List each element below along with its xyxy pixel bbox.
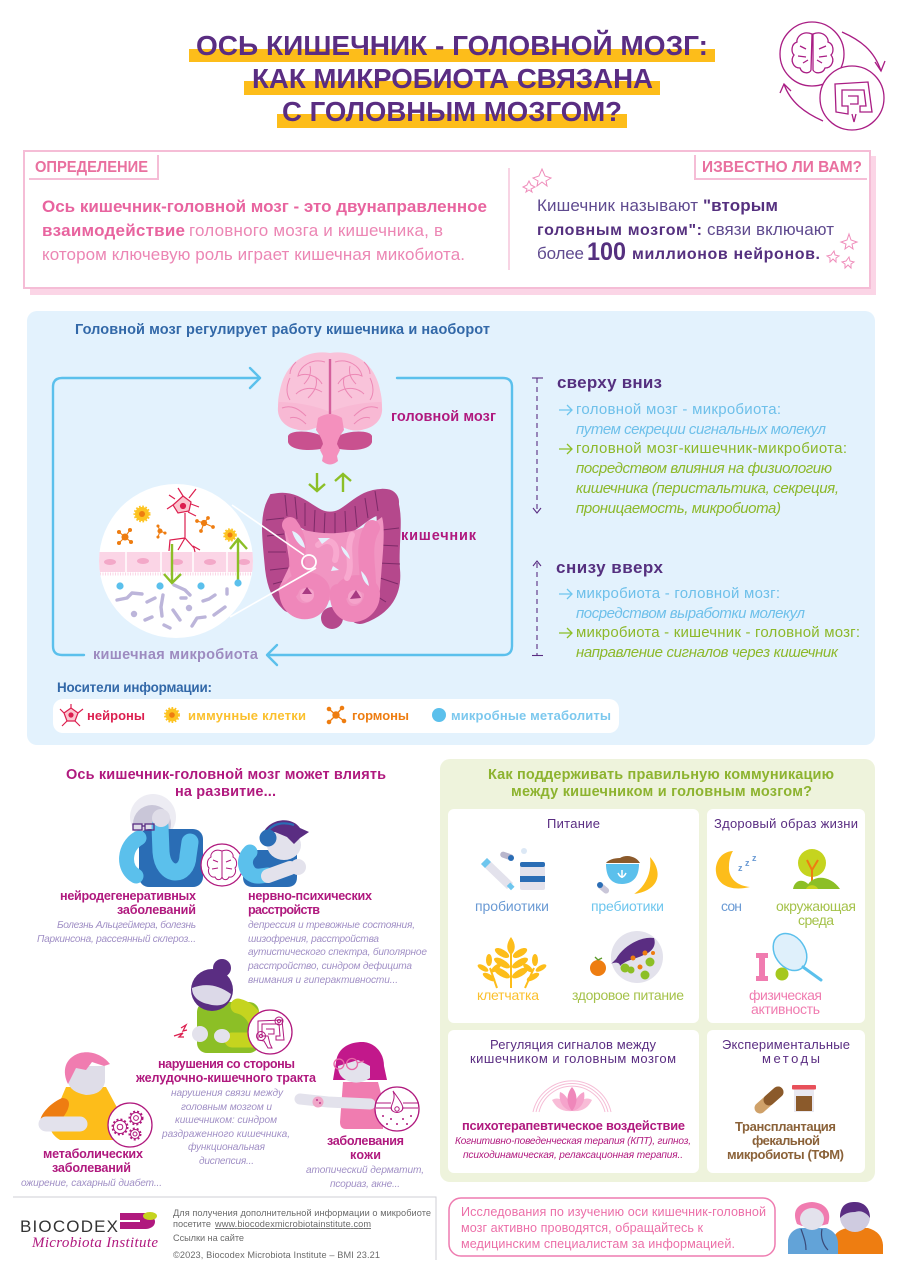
text: did you know: более bbox=[537, 244, 584, 263]
text: neurodegenerative bbox=[37, 889, 196, 945]
text: metabolic: ожирение, сахарный диабет... bbox=[21, 1177, 162, 1189]
callout: медицинским специалистам за информацией. bbox=[461, 1237, 735, 1251]
text: neuropsychiatric: аутистического спектра, биполярное bbox=[248, 946, 427, 958]
text: did you know: связи включают bbox=[707, 220, 834, 239]
panel: signal regulation bbox=[448, 1030, 699, 1173]
text: neuropsychiatric bbox=[247, 889, 427, 986]
heading: experimental: методы bbox=[762, 1051, 820, 1066]
label: fmt: Трансплантация bbox=[735, 1119, 836, 1134]
icon: magnified microbiota circle bbox=[95, 484, 316, 638]
text: bottom up: направление сигналов через кишечник bbox=[576, 644, 839, 661]
title bbox=[189, 29, 715, 128]
label: fmt bbox=[727, 1119, 844, 1162]
text: immune cells: иммунные клетки bbox=[188, 708, 306, 723]
label: fmt: фекальной bbox=[752, 1133, 820, 1148]
panel: nutrition bbox=[448, 809, 699, 1023]
callout bbox=[449, 1198, 775, 1256]
text: gastrointestinal: диспепсия... bbox=[199, 1156, 254, 1167]
text: gastrointestinal: нарушения связи между bbox=[171, 1088, 284, 1099]
panel: footer bbox=[13, 1197, 883, 1260]
callout: мозг активно проводятся, обращайтесь к bbox=[461, 1221, 703, 1235]
heading: regulation: кишечником и головным мозгом bbox=[470, 1051, 676, 1066]
text: footer info: www.biocodexmicrobiotainstitute.com bbox=[214, 1219, 371, 1229]
logo: BIOCODEX bbox=[20, 1217, 118, 1236]
text: neurodegenerative: Паркинсона, рассеянный склероз... bbox=[37, 934, 196, 945]
heading: did you know: ИЗВЕСТНО ЛИ ВАМ? bbox=[702, 159, 862, 176]
panel: brain gut axis bbox=[27, 311, 875, 745]
text: top down: головной мозг-кишечник-микробиота: bbox=[576, 440, 847, 457]
text: gastrointestinal bbox=[135, 1057, 317, 1167]
title: ОСЬ КИШЕЧНИК - ГОЛОВНОЙ МОЗГ: bbox=[196, 29, 708, 61]
label: brain: головной мозг bbox=[391, 409, 496, 425]
heading: definition: ОПРЕДЕЛЕНИЕ bbox=[35, 159, 148, 176]
label: physical activity bbox=[749, 987, 822, 1017]
text: skin: заболевания bbox=[327, 1134, 404, 1148]
text: neuropsychiatric: расстройство, синдром дефицита bbox=[247, 960, 412, 972]
text: neurodegenerative: заболеваний bbox=[117, 903, 196, 917]
label: environment: среда bbox=[798, 912, 834, 928]
label: psychotherapy bbox=[455, 1118, 691, 1161]
label: healthy food: здоровое питание bbox=[572, 987, 684, 1003]
text: neurodegenerative: Болезнь Альцгеймера, болезнь bbox=[57, 919, 196, 931]
label: fibre: клетчатка bbox=[477, 987, 539, 1003]
icon: wheat fibre bbox=[477, 937, 547, 988]
icon: brain and gut cycle bbox=[780, 22, 885, 130]
panel: definition and did you know bbox=[24, 151, 876, 295]
title: КАК МИКРОБИОТА СВЯЗАНА bbox=[252, 63, 653, 94]
heading: regulation: Регуляция сигналов между bbox=[490, 1037, 656, 1052]
label: fmt: микробиоты (ТФМ) bbox=[727, 1147, 844, 1162]
text: gastrointestinal: функциональная bbox=[188, 1141, 266, 1153]
text: did you know: 100 bbox=[587, 238, 626, 266]
icon: moon bbox=[716, 851, 757, 889]
text: footer info: Ссылки на сайте bbox=[173, 1233, 244, 1243]
label: intestine: кишечник bbox=[401, 528, 477, 544]
text: gastrointestinal: головным мозгом и bbox=[181, 1102, 272, 1113]
text: skin: кожи bbox=[350, 1148, 381, 1162]
text: neurodegenerative: нейродегенеративных bbox=[60, 889, 196, 903]
text: definition: котором ключевую роль играет кишечная микобиота. bbox=[42, 245, 465, 264]
icon: tree bbox=[793, 849, 840, 889]
text: top down: проницаемость, микробиота) bbox=[576, 500, 781, 517]
text: footer info: Для получения дополнительной информации о микробиоте bbox=[173, 1208, 431, 1218]
heading: regulation bbox=[470, 1037, 676, 1066]
icon: skin badge bbox=[375, 1087, 419, 1131]
icon: brain badge bbox=[201, 844, 243, 886]
icon: moon: z bbox=[738, 863, 743, 873]
panel: experimental methods bbox=[707, 1030, 865, 1173]
icon: prebiotics bbox=[596, 856, 658, 895]
icon: moon: z bbox=[752, 853, 757, 863]
arrow: green pair between brain and gut bbox=[309, 473, 351, 492]
text: footer info: ©2023, Biocodex Microbiota Institute – BMI 23.21 bbox=[173, 1250, 380, 1260]
text: neuropsychiatric: нервно-психических bbox=[248, 889, 372, 903]
heading: information carriers: Носители информации: bbox=[57, 680, 212, 695]
icon: bacteria bbox=[117, 585, 227, 628]
label: environment: окружающая bbox=[776, 898, 856, 914]
label: physical activity: физическая bbox=[749, 987, 822, 1003]
text: did you know bbox=[537, 196, 834, 266]
icon: neuron bbox=[167, 488, 200, 552]
panel: lifestyle bbox=[707, 809, 865, 1023]
logo: Microbiota Institute bbox=[31, 1235, 158, 1251]
text: bottom up bbox=[556, 558, 860, 661]
icon: brain bbox=[278, 352, 382, 464]
icon: healthy food bbox=[590, 931, 663, 983]
label: probiotics: пробиотики bbox=[475, 898, 549, 914]
text: did you know: головным мозгом": bbox=[537, 222, 702, 239]
text: neuropsychiatric: внимания и гиперактивности... bbox=[248, 975, 398, 986]
heading: conditions bbox=[66, 767, 386, 800]
icon: neuron sparks bbox=[523, 169, 857, 268]
icon: moon: z bbox=[745, 858, 750, 868]
text: bottom up: посредством выработки молекул bbox=[576, 605, 806, 622]
heading: conditions: Ось кишечник-головной мозг может влиять bbox=[66, 767, 386, 783]
arrow: green in circle bbox=[164, 539, 247, 583]
text: neuropsychiatric: депрессия и тревожные состояния, bbox=[248, 920, 415, 931]
text: metabolic bbox=[21, 1147, 162, 1189]
icon: person with metabolic disease bbox=[40, 1052, 121, 1140]
text: footer info bbox=[173, 1208, 431, 1260]
text: gastrointestinal: раздраженного кишечника, bbox=[161, 1129, 290, 1140]
logo bbox=[20, 1212, 158, 1251]
icon: capsule and cup bbox=[760, 1085, 816, 1112]
label: physical activity: активность bbox=[751, 1001, 820, 1017]
label: environment bbox=[776, 898, 856, 928]
text: top down: сверху вниз bbox=[557, 373, 662, 392]
label: psychotherapy: психотерапевтическое воздействие bbox=[462, 1118, 685, 1133]
text: did you know: "вторым bbox=[703, 196, 778, 215]
heading: support: между кишечником и головным мозгом? bbox=[511, 784, 812, 800]
icon: probiotics bbox=[481, 848, 545, 890]
arrow: outer loop bbox=[53, 368, 512, 665]
legend bbox=[53, 699, 619, 733]
icon: metabolite legend bbox=[432, 708, 446, 722]
text: gastrointestinal: кишечником: синдром bbox=[175, 1115, 277, 1126]
text: skin: псориаз, акне... bbox=[330, 1179, 400, 1190]
text: skin: атопический дерматит, bbox=[306, 1165, 424, 1176]
text: did you know: Кишечник называют bbox=[537, 196, 698, 215]
text: metabolites: микробные метаболиты bbox=[451, 708, 611, 723]
heading: axis: Головной мозг регулирует работу кишечника и наоборот bbox=[75, 322, 490, 338]
text: hormones: гормоны bbox=[352, 708, 409, 723]
icon: dumbbell and racket bbox=[756, 927, 821, 981]
text: bottom up: снизу вверх bbox=[556, 558, 664, 577]
text: definition bbox=[42, 197, 487, 264]
heading: conditions: на развитие... bbox=[175, 784, 276, 800]
icon: gears badge bbox=[108, 1103, 152, 1147]
text: metabolic: заболеваний bbox=[52, 1161, 131, 1175]
text: top down bbox=[557, 373, 847, 517]
arrow: top down dashed bbox=[532, 378, 543, 513]
heading: support bbox=[488, 767, 834, 800]
label: psychotherapy: Когнитивно-поведенческая терапия (КПТ), гипноз, bbox=[455, 1136, 691, 1147]
icon: person with headphones bbox=[243, 820, 309, 887]
icon: neuron legend bbox=[60, 704, 83, 726]
text: top down: путем секреции сигнальных молекул bbox=[576, 421, 827, 438]
icon: lotus bbox=[533, 1081, 611, 1112]
text: gastrointestinal: желудочно-кишечного тракта bbox=[135, 1071, 317, 1085]
icon: woman with gut pain bbox=[174, 959, 259, 1053]
panel: how to support bbox=[440, 759, 875, 1182]
arrow: bottom up dashed bbox=[532, 561, 543, 656]
label: prebiotics: пребиотики bbox=[591, 898, 664, 914]
icon: doctors bbox=[788, 1202, 883, 1254]
text: neuropsychiatric: шизофрения, расстройства bbox=[248, 933, 379, 945]
text: definition: головного мозга и кишечника, в bbox=[189, 221, 443, 240]
icon: hormones bbox=[118, 517, 214, 544]
text: gastrointestinal: нарушения со стороны bbox=[158, 1057, 295, 1071]
text: bottom up: микробиота - головной мозг: bbox=[576, 585, 780, 602]
panel: conditions bbox=[21, 767, 427, 1190]
icon: gut badge bbox=[248, 1010, 292, 1054]
text: neuropsychiatric: расстройств bbox=[248, 903, 320, 917]
heading: lifestyle: Здоровый образ жизни bbox=[714, 816, 858, 831]
text: top down: головной мозг - микробиота: bbox=[576, 401, 781, 418]
icon: elderly person bbox=[127, 794, 203, 887]
label: gut microbiota: кишечная микробиота bbox=[93, 647, 259, 663]
heading: experimental: Экспериментальные bbox=[722, 1037, 850, 1052]
icon: hormone legend bbox=[327, 706, 346, 724]
icon: immune legend bbox=[166, 708, 178, 722]
label: psychotherapy: психодинамическая, релаксационная терапия.. bbox=[463, 1150, 683, 1161]
heading: nutrition: Питание bbox=[547, 816, 600, 831]
text: top down: кишечника (перистальтика, секреция, bbox=[576, 480, 839, 497]
text: neurons: нейроны bbox=[87, 708, 145, 723]
icon: person with skin disease bbox=[300, 1042, 387, 1129]
callout: Исследования по изучению оси кишечник-головной bbox=[461, 1205, 766, 1219]
text: bottom up: микробиота - кишечник - головной мозг: bbox=[576, 624, 860, 641]
icon: immune cells bbox=[135, 507, 236, 540]
text: did you know: миллионов нейронов. bbox=[632, 246, 820, 263]
icon: intestine bbox=[266, 491, 400, 629]
heading: support: Как поддерживать правильную коммуникацию bbox=[488, 767, 834, 783]
text: top down: посредством влияния на физиологию bbox=[576, 460, 832, 477]
title: С ГОЛОВНЫМ МОЗГОМ? bbox=[282, 96, 622, 127]
text: definition: взаимодействие bbox=[42, 221, 185, 240]
heading: experimental bbox=[722, 1037, 850, 1066]
label: sleep: сон bbox=[721, 898, 742, 914]
icon: metabolite dots bbox=[116, 579, 242, 590]
text: skin bbox=[306, 1134, 424, 1190]
text: footer info: посетите bbox=[173, 1219, 211, 1229]
text: metabolic: метаболических bbox=[43, 1147, 143, 1161]
text: definition: Ось кишечник-головной мозг - это двунаправленное bbox=[42, 197, 487, 216]
